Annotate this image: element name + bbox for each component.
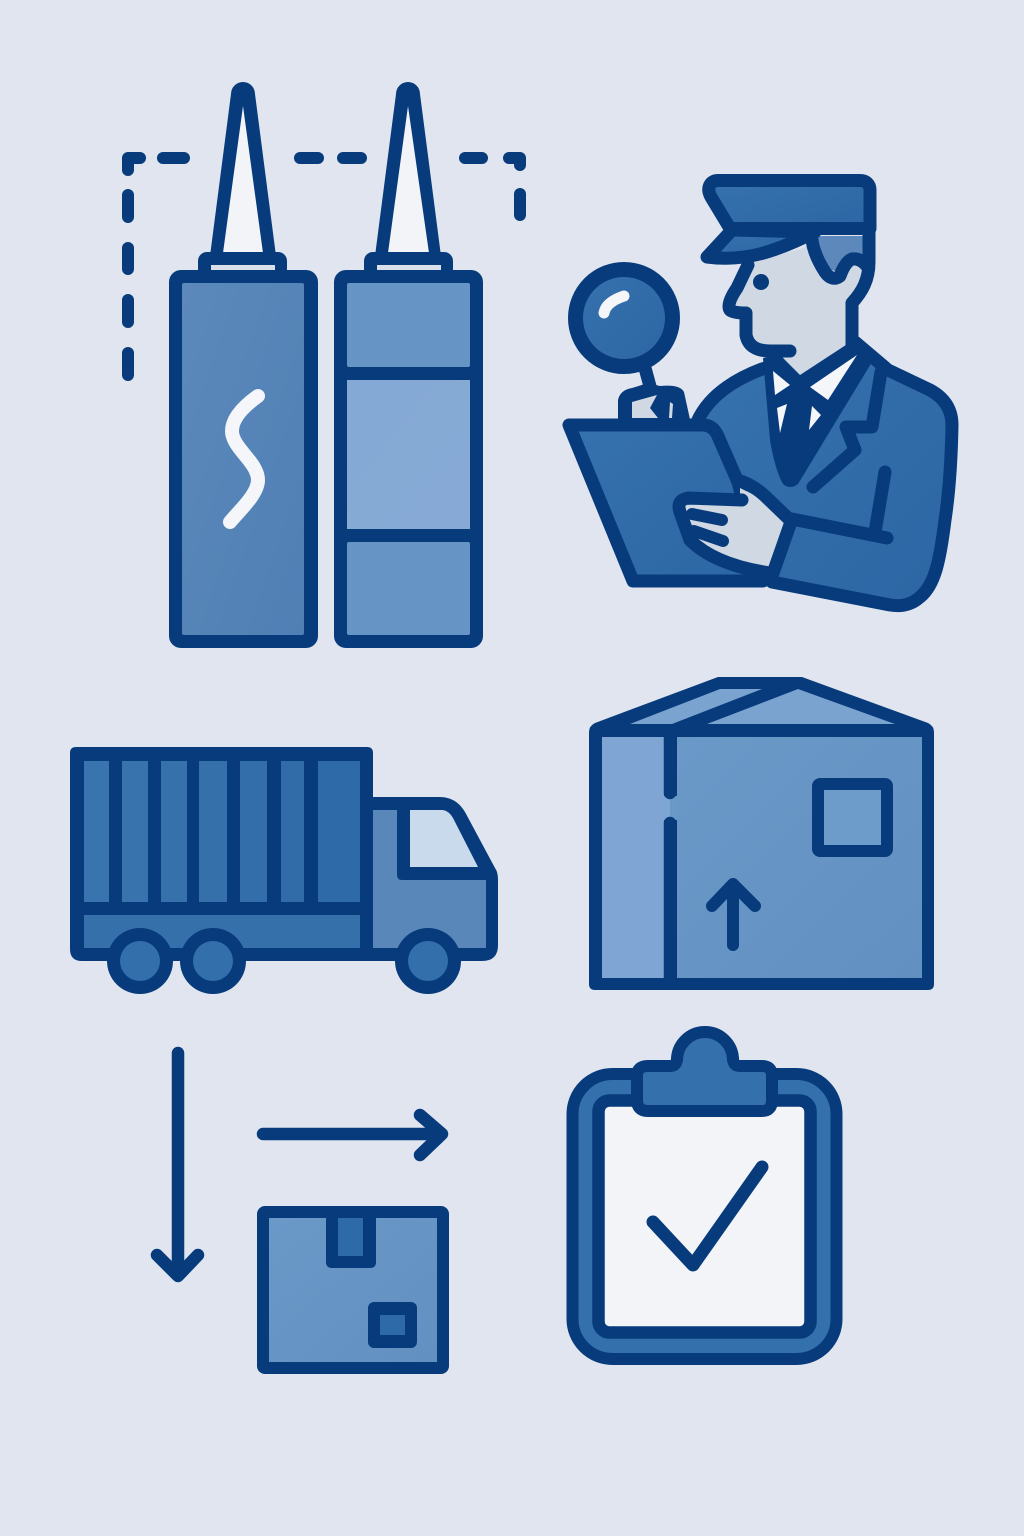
nozzle tip (223, 106, 263, 253)
nozzle outline (210, 82, 276, 256)
hand on magnifier (618, 383, 691, 424)
right roof flap (707, 689, 895, 724)
arrow: rightward (263, 1115, 442, 1155)
eye (753, 274, 769, 290)
collar slot (377, 265, 441, 270)
middle wheel (180, 928, 246, 994)
icon: inspector with magnifier and clipboard (569, 232, 952, 606)
lens highlight (604, 296, 624, 313)
icon: left tube with squiggle (169, 82, 318, 648)
icon: inspector cap (707, 180, 870, 258)
icon: small parcel (257, 1206, 449, 1374)
squiggle line (230, 396, 258, 522)
cap brim (707, 230, 815, 258)
icon: clipboard with check mark (572, 1032, 836, 1359)
tube outline (334, 270, 483, 648)
clipboard board (572, 1074, 836, 1359)
parcel label (368, 1302, 417, 1348)
magnifier lens (576, 270, 672, 366)
box seam ends (664, 737, 676, 978)
jacket seam (875, 472, 885, 532)
up arrow (712, 884, 755, 945)
bottom band (347, 542, 470, 635)
icon: delivery truck (70, 747, 498, 994)
icon: large shipping box (589, 677, 934, 990)
holding hand (684, 488, 790, 570)
box front panel (677, 737, 922, 978)
fingers (692, 514, 723, 541)
arm line (737, 480, 790, 520)
shirt collar and tie (763, 341, 872, 487)
tube collar (198, 252, 287, 278)
clipboard clip (637, 1032, 772, 1111)
tube collar (364, 252, 453, 278)
jacket lapel (813, 372, 881, 487)
check mark (653, 1167, 762, 1265)
clipboard paper (598, 1100, 810, 1332)
box silhouette (589, 677, 934, 990)
sleeve and cuff (772, 519, 887, 576)
icon: dashed guide frame (128, 158, 520, 375)
arrow: downward (157, 1053, 198, 1276)
hair (814, 236, 864, 272)
cargo lower band (84, 915, 360, 948)
face and neck (729, 238, 869, 378)
tube fill (182, 283, 304, 635)
parcel body (269, 1218, 437, 1362)
cap crown (709, 180, 870, 228)
tube outline (169, 270, 318, 648)
hair outline (812, 240, 866, 278)
jacket body (697, 342, 952, 606)
left roof flap (630, 689, 762, 724)
box label (818, 784, 887, 851)
top band (347, 283, 470, 367)
nozzle outline (375, 82, 441, 256)
container slats (84, 761, 360, 902)
collar slot (211, 265, 275, 270)
truck silhouette (70, 747, 498, 961)
front wheel (395, 928, 461, 994)
icon: right tube with bands (334, 82, 483, 648)
magnifier handle (645, 368, 651, 390)
parcel tape (326, 1218, 376, 1268)
clipboard panel (569, 425, 763, 581)
cab window (410, 810, 478, 867)
rear wheel (107, 928, 173, 994)
seam gap (664, 796, 670, 820)
truck cab panel (373, 810, 486, 948)
box left panel (602, 737, 664, 978)
parcel outline (257, 1206, 449, 1374)
head outline (852, 232, 869, 345)
middle band (347, 380, 470, 529)
nozzle tip (388, 106, 429, 253)
face profile (729, 265, 790, 351)
hand outline (679, 498, 770, 573)
